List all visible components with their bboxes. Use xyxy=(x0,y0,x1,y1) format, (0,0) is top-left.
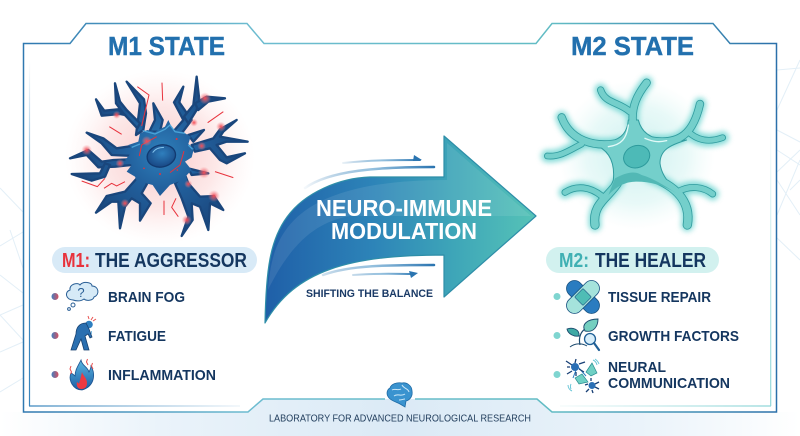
list: M2 benefits: COMMUNICATION xyxy=(608,376,730,392)
footer band xyxy=(0,399,800,436)
background network lines: right xyxy=(777,60,800,260)
title: M1 State: M1 STATE xyxy=(108,31,225,61)
footer text: LABORATORY FOR ADVANCED NEUROLOGICAL RESEARCH xyxy=(269,413,531,425)
list: M2 benefits: TISSUE REPAIR xyxy=(608,290,711,306)
icon: fatigued person xyxy=(71,316,96,350)
title: M2 State: M2 STATE xyxy=(571,31,694,61)
inner frame lines xyxy=(29,60,771,406)
list: M2 benefits xyxy=(554,277,739,393)
icon: thought cloud: ? xyxy=(77,285,85,300)
arrow label: NEURO-IMMUNE xyxy=(316,195,492,221)
central arrow xyxy=(265,136,536,323)
central arrow: MODULATION xyxy=(331,218,477,244)
list: M2 benefits: GROWTH FACTORS xyxy=(608,329,739,345)
panel: M2 heading pill xyxy=(546,247,719,273)
list: M2 benefits: NEURAL xyxy=(608,360,666,376)
panel: M1 heading pill xyxy=(52,247,257,273)
panel: M1 heading pill: THE AGGRESSOR xyxy=(95,250,247,272)
panel: M1 heading pill: M1: xyxy=(62,250,90,272)
speed lines above arrow xyxy=(305,155,434,188)
M2 healing neuron illustration xyxy=(547,80,723,230)
M1 aggressive neuron illustration xyxy=(65,70,255,245)
icon: sprout with magnifier xyxy=(567,319,599,350)
speed lines below arrow xyxy=(323,265,434,278)
list: M1 symptoms: INFLAMMATION xyxy=(108,368,216,384)
arrow lighter upper sheen xyxy=(268,143,531,290)
list: M1 symptoms: BRAIN FOG xyxy=(108,290,185,306)
icon: thought cloud xyxy=(66,282,98,310)
arrow caption: SHIFTING THE BALANCE xyxy=(306,288,433,300)
panel: M2 heading pill: M2: xyxy=(559,250,589,272)
list: M1 symptoms: FATIGUE xyxy=(108,329,166,345)
icon: flame xyxy=(70,359,94,390)
icon: communicating neurons xyxy=(566,359,599,393)
list: M1 symptoms xyxy=(52,282,216,390)
icon: brain xyxy=(387,383,412,407)
background network lines: left xyxy=(0,188,23,392)
icon: crossed bandages xyxy=(563,277,603,317)
panel: M2 heading pill: THE HEALER xyxy=(595,250,706,272)
